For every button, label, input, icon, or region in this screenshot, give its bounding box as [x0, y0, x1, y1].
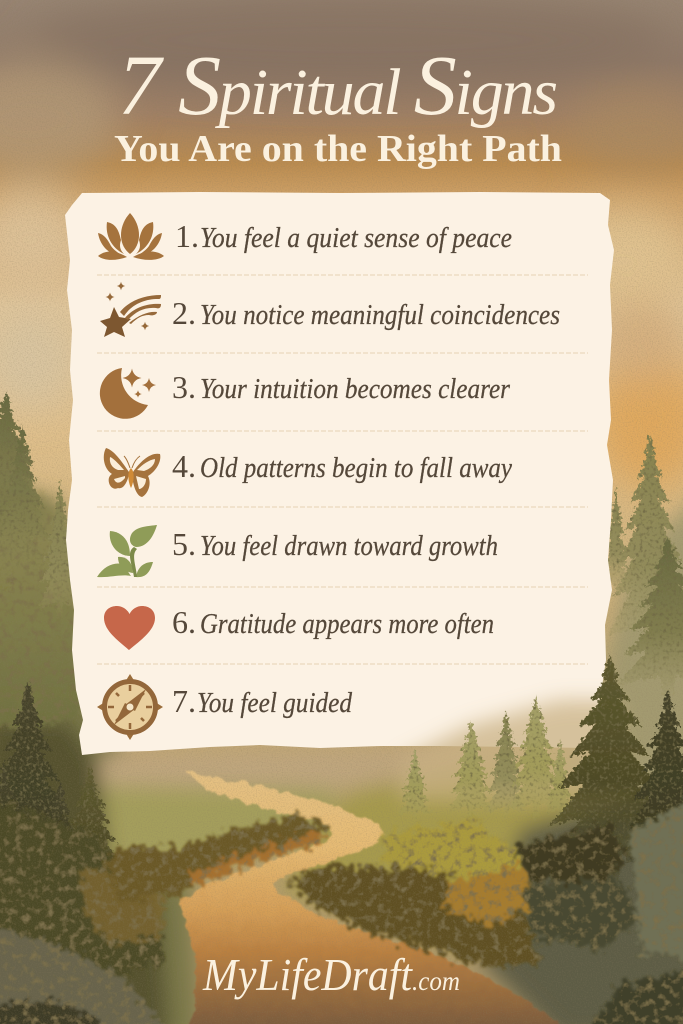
item 5: You feel drawn toward growth [200, 530, 498, 562]
item 3: Your intuition becomes clearer [200, 373, 511, 405]
roadside bushes left [105, 815, 325, 905]
winding path [178, 772, 570, 1024]
far tree line [398, 695, 574, 822]
item 1 text: 1. [175, 218, 199, 254]
icon: sprout [97, 525, 157, 577]
item 1: You feel a quiet sense of peace [200, 222, 512, 254]
dark undergrowth [515, 800, 683, 1024]
divider lines [97, 275, 588, 664]
footer: website: .com [412, 966, 460, 996]
icon: butterfly [104, 448, 160, 497]
panel: torn paper list [65, 192, 614, 755]
item 2 text: 2. [172, 295, 196, 331]
icon: shooting star [100, 282, 161, 337]
item 4 [104, 448, 512, 497]
item 4: Old patterns begin to fall away [200, 452, 512, 484]
icon: crescent moon and stars [100, 368, 156, 419]
icon: heart [104, 606, 155, 650]
roadside bushes right [290, 820, 540, 965]
item 3 text: 3. [172, 369, 196, 405]
item 6: Gratitude appears more often [200, 608, 494, 640]
item 3 [100, 368, 511, 419]
large dark firs [540, 655, 683, 885]
item 7: You feel guided [197, 687, 352, 719]
far right forest behind list [602, 434, 683, 697]
foreground trees over lower right of paper [398, 655, 683, 1024]
icon: lotus [98, 213, 164, 260]
item 2 [100, 282, 560, 337]
title line 1: 7 Spiritual Signs [118, 37, 558, 133]
item 7 [97, 674, 352, 740]
item 7 text: 7. [172, 683, 196, 719]
item 1 [98, 213, 512, 260]
mottled olive canopy [0, 490, 80, 730]
item 2: You notice meaningful coincidences [200, 299, 560, 331]
title [114, 37, 562, 170]
icon: compass [97, 674, 163, 740]
undergrowth [0, 800, 165, 1024]
item 6 text: 6. [172, 604, 196, 640]
item 5 text: 5. [172, 526, 196, 562]
mist behind far trees [400, 700, 620, 800]
item 6 [104, 604, 494, 650]
item 4 text: 4. [172, 448, 196, 484]
left forest [0, 392, 165, 1024]
item 5 [97, 525, 498, 577]
paper sheet [65, 192, 614, 755]
soft forest colour masses [0, 480, 683, 1024]
title line 2: You Are on the Right Path [114, 128, 562, 170]
footer: website: MyLifeDraft [202, 949, 413, 1000]
